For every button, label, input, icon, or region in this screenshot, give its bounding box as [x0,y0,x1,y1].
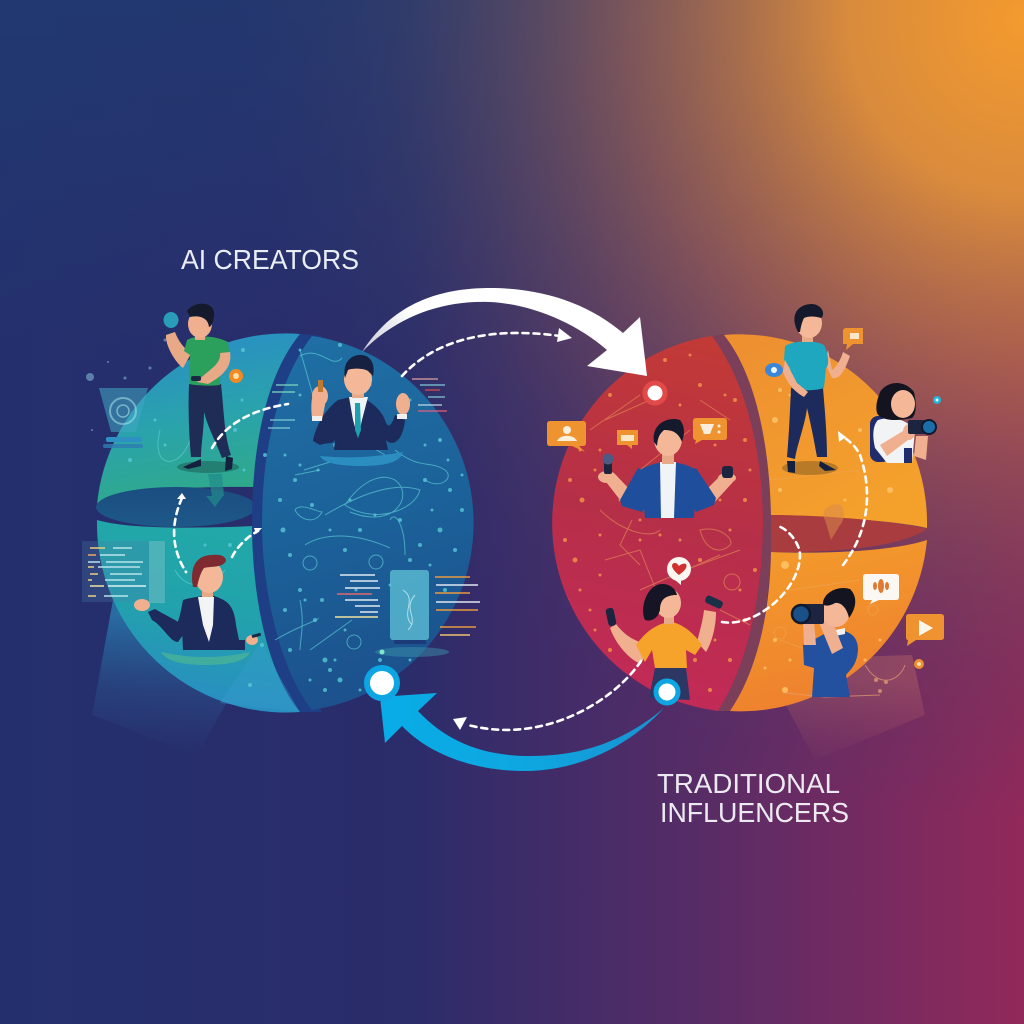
figure: blue jacket man holding mic [598,419,736,518]
arm left [148,609,188,642]
band: muted divider [712,334,772,711]
location pin on slice [823,504,844,540]
constellation outside right sphere [785,665,905,697]
icon: orange profile bubble [547,421,586,452]
star dots left sphere [128,343,464,696]
skirt [649,668,690,700]
arrow: faint down arrow [206,474,224,507]
strap [904,448,912,463]
head [662,450,674,464]
network lines [158,350,448,650]
icon: video play bubble [906,614,944,646]
title: AI creators: AI CREATORS [181,244,359,275]
badge [229,369,243,383]
shirt [349,397,368,438]
arrow: big white curved arrow [362,288,647,376]
icon: orange chat bubble large [693,418,727,444]
shirt [198,597,214,642]
mic and cup [604,460,612,474]
sweater [803,630,858,697]
figure: suit man upper right [311,355,410,450]
head [195,330,205,340]
icon: sound bubble white [863,574,899,604]
shirt [784,341,828,390]
arms [610,624,650,664]
head [202,585,213,597]
jacket [640,462,697,518]
arm [825,350,850,378]
title: traditional influencers [657,768,849,828]
dashed: green figure to suit man [212,404,288,448]
head [352,388,364,398]
scatter dots right sphere [563,354,893,693]
ring: blue node right [656,681,678,703]
dashed: lower figure to divider [232,531,258,557]
shoulders and suit [313,396,405,450]
shirt [636,622,702,668]
dashed: top sweep to right sphere [402,333,560,376]
near arm [197,352,230,384]
figure: green shirt man standing [164,304,243,471]
head [802,330,813,342]
shoes [183,459,201,469]
panel: AI creators sphere [96,333,474,713]
icon: blue badge beside teal figure [765,363,783,377]
collar [826,628,845,637]
sphere half: right deep blue [262,336,474,710]
shoes [787,461,795,473]
hair [876,383,916,420]
hologram display left [86,338,166,448]
icon: orange social bubble top [843,328,863,350]
dashed: orange loop [842,436,867,565]
wedge highlight on lower left [220,640,300,712]
shirt [873,418,915,463]
title: traditional influencers: INFLUENCERS [660,797,849,828]
light beam under left sphere [92,600,262,755]
icon: orange chat bubble small [617,430,638,449]
icon: small status dots [914,396,941,669]
dashed: ring inside left [174,498,186,572]
hand right [246,635,258,645]
shadow: standing figure [177,461,239,473]
figure: blue sweater person with camera [792,588,858,697]
face [891,390,915,418]
sphere quadrant: upper left teal [97,333,300,505]
sphere half: red left [552,336,763,711]
sphere quadrant: lower left teal [97,520,300,713]
sphere quadrant: upper orange [724,334,927,528]
near arm [818,615,843,654]
arms [880,431,908,456]
figure: teal shirt person standing [783,304,850,473]
camera [800,604,824,624]
head [664,612,674,624]
figure: woman with camera [870,383,936,463]
slice: dark ellipse [96,487,256,527]
camera [908,420,930,434]
shelf: small disc under right figure [320,452,403,466]
code panel left [82,541,166,603]
ring: red node [645,383,665,403]
arrow: big blue curved arrow [380,693,664,771]
shadow: standing figure [782,461,838,475]
left arm [783,360,808,397]
arms and hands [311,391,325,420]
band: dark divider [252,334,322,712]
code lines around suit figure [268,379,447,428]
panel: traditional influencers sphere [552,334,927,711]
title: traditional influencers: TRADITIONAL [657,768,840,799]
right arm with paddle [164,312,178,328]
pants [787,388,827,459]
mics [605,607,617,627]
dashed: lower sweep back left [468,661,641,730]
phone display with code [335,570,480,657]
slice: dark red ellipse [771,515,927,552]
figure: yellow shirt woman with mics [605,584,724,700]
figure: suit man lower left [134,555,261,650]
suit [172,596,245,650]
ring: blue node left [367,668,397,698]
arrowheads: dashed flow tips [177,328,846,730]
tie [355,403,361,438]
sphere quadrant: lower orange [730,540,927,711]
shirt [660,462,676,518]
shelf: glowing disc under lower figure [161,652,250,665]
light beam under right sphere [762,655,925,760]
network lines [590,395,878,660]
shirt [184,336,229,386]
backpack [870,416,890,462]
dashed: red to orange lower [722,526,800,623]
legs [189,384,231,458]
head [822,595,850,627]
sleeves [620,468,660,512]
icon: heart bubble [667,557,691,585]
forearms [603,474,634,505]
arrows: dashed white flow paths [174,333,867,730]
